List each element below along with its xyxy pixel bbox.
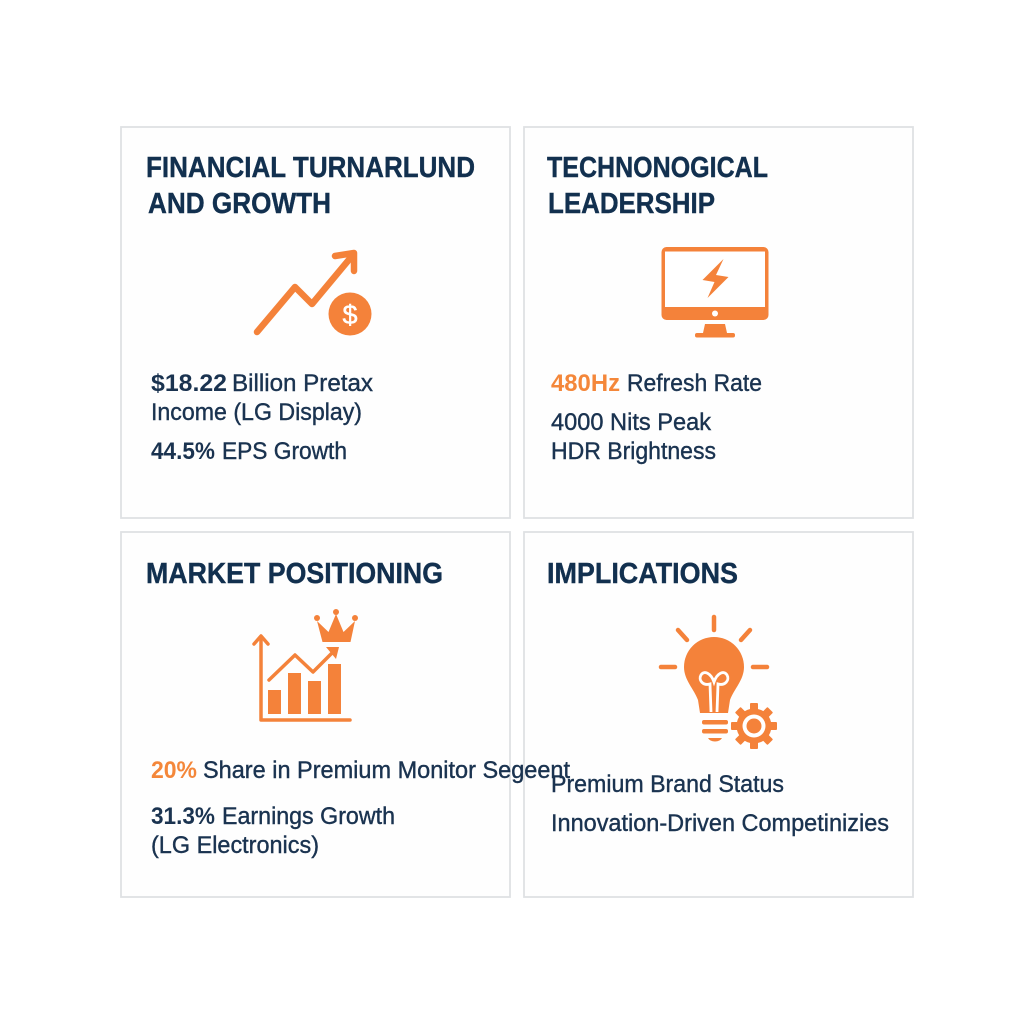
heading: financial turnaround [146, 152, 475, 220]
text: implications list [551, 771, 889, 837]
text: market metrics: (LG Electronics) [151, 832, 319, 859]
icon: bar chart with crown [254, 609, 358, 720]
heading: market positioning: MARKET POSITIONING [146, 558, 443, 590]
heading: technological leadership [547, 152, 768, 220]
text: technology metrics: 480Hz [551, 370, 620, 397]
text: technology metrics: HDR Brightness [551, 438, 716, 465]
heading: implications: IMPLICATIONS [547, 558, 738, 590]
panel: financial turnaround and growth [121, 127, 510, 518]
heading: financial turnaround: FINANCIAL TURNARLUND [146, 152, 475, 184]
text: financial metrics: EPS Growth [222, 438, 347, 465]
heading: financial turnaround: AND GROWTH [148, 188, 331, 220]
panel: market positioning [121, 532, 570, 897]
text: implications list: Premium Brand Status [551, 771, 784, 798]
text: financial metrics: $18.22 [151, 370, 227, 397]
text: market metrics: 31.3% [151, 803, 215, 830]
text: financial metrics: Billion Pretax [232, 370, 373, 397]
text: market metrics [151, 757, 570, 859]
text: financial metrics: 44.5% [151, 438, 215, 465]
panel: technological leadership [524, 127, 913, 518]
text: technology metrics: 4000 Nits Peak [551, 409, 712, 436]
heading: technological leadership: LEADERSHIP [548, 188, 715, 220]
panel: implications [524, 532, 913, 897]
text: technology metrics [551, 370, 762, 465]
text: technology metrics: Refresh Rate [627, 370, 762, 397]
icon: light bulb with gear [661, 617, 779, 751]
text: implications list: Innovation-Driven Competinizies [551, 810, 889, 837]
icon: rising arrow with dollar coin: $ [342, 300, 358, 330]
icon: monitor with lightning bolt [662, 247, 768, 338]
text: market metrics: Earnings Growth [222, 803, 395, 830]
text: market metrics: Share in Premium Monitor Segeent [203, 757, 570, 784]
heading: technological leadership: TECHNONOGICAL [547, 152, 768, 184]
text: market metrics: 20% [151, 757, 197, 784]
text: financial metrics: Income (LG Display) [151, 399, 362, 426]
icon: rising arrow with dollar coin [257, 253, 372, 336]
text: financial metrics [151, 370, 373, 465]
